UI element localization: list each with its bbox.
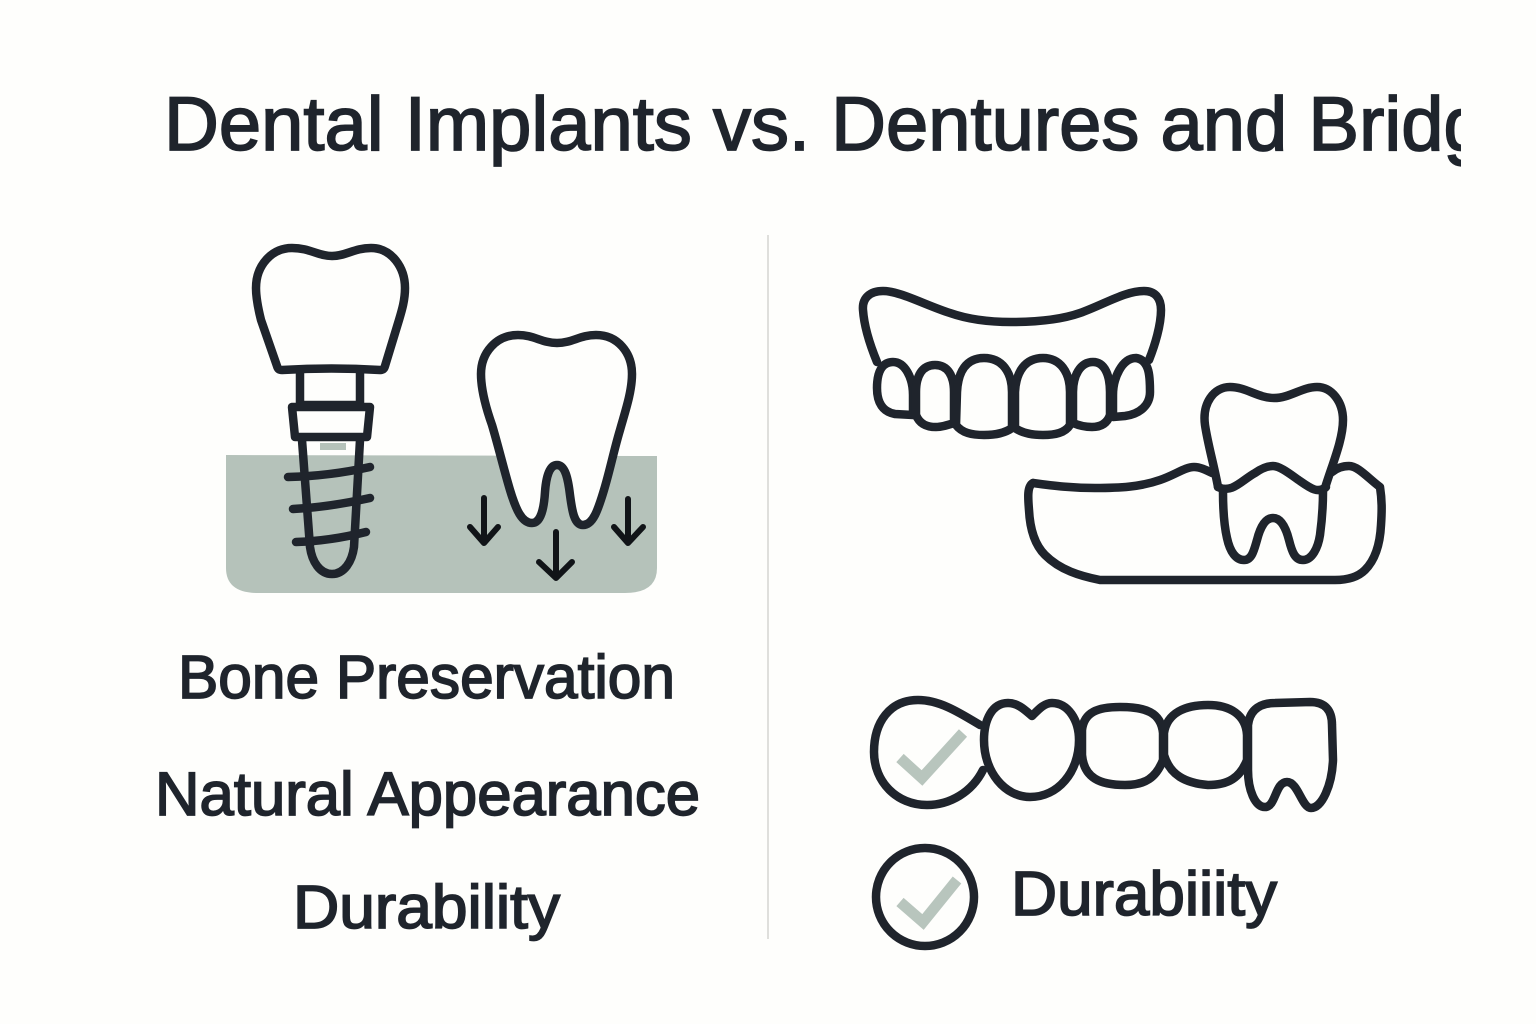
label: durability: Durability bbox=[293, 873, 561, 941]
panel: dental implant illustration bbox=[226, 248, 657, 593]
icon: bone loss arrows bbox=[470, 498, 643, 578]
icon: upper denture bbox=[863, 291, 1161, 435]
label: bone preservation: Bone Preservation bbox=[178, 643, 675, 711]
icon: implant bbox=[256, 248, 405, 574]
bone and gum block bbox=[226, 455, 657, 593]
title: Dental Implants vs. Dentures and Bridges bbox=[164, 82, 1536, 167]
icon: natural tooth bbox=[481, 335, 632, 525]
icon: bridge with check bbox=[874, 700, 1333, 808]
check mark bbox=[900, 733, 963, 778]
label: natural appearance: Natural Appearance bbox=[155, 760, 700, 828]
icon: check circle bbox=[876, 848, 974, 946]
icon: lower jaw with tooth bbox=[1028, 387, 1382, 580]
durability check row bbox=[876, 848, 1277, 946]
divider bbox=[767, 235, 769, 939]
label: durabiiity: Durabiiity bbox=[1011, 860, 1277, 929]
